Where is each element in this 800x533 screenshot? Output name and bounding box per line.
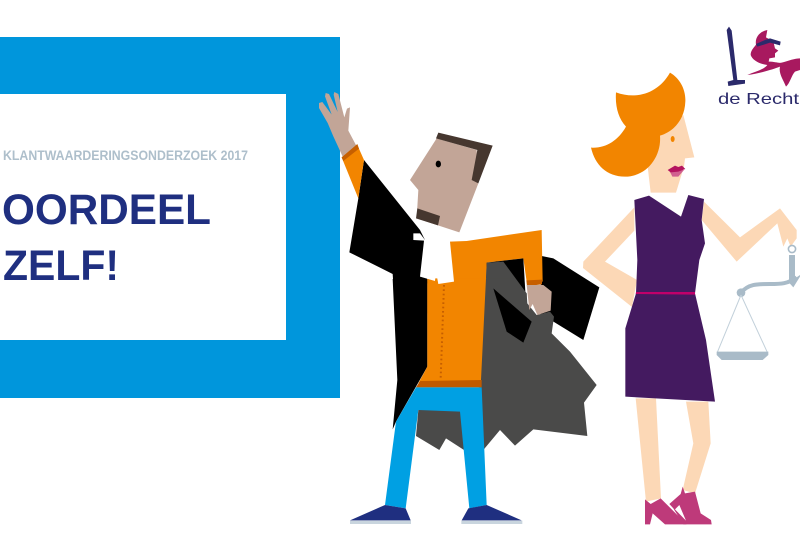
raised right arm: [702, 202, 797, 262]
eye: [436, 161, 441, 167]
subtitle: KLANTWAARDERINGSONDERZOEK 2017: [3, 148, 248, 163]
carried coat: [416, 278, 597, 450]
hair: [591, 73, 685, 177]
shoe gap: [675, 505, 686, 521]
logo text: de Recht: [718, 91, 800, 108]
buttons: [441, 285, 444, 378]
scale pivot: [737, 288, 745, 297]
scale ring: [788, 245, 796, 253]
title: [2, 186, 211, 290]
face and neck: [648, 115, 694, 193]
gown left: [349, 160, 427, 283]
gavel: [727, 27, 745, 86]
raised hand: [319, 92, 357, 158]
coat shadow: [493, 288, 532, 343]
coat fold: [485, 262, 527, 313]
scale stem: [789, 255, 800, 287]
gown lower: [393, 279, 427, 429]
collar: [413, 233, 454, 284]
eye: [671, 136, 675, 142]
head: [410, 138, 478, 232]
scale beam: [741, 277, 797, 293]
shoes: [645, 487, 712, 524]
figure: lawyer: [319, 92, 599, 524]
shoe shadows: [350, 521, 522, 524]
cuff: [342, 144, 359, 161]
right black sleeve: [540, 256, 599, 340]
lawyer lower body: [350, 278, 597, 524]
dress: [625, 195, 715, 402]
torso: [427, 230, 543, 313]
justice figure: [747, 30, 800, 87]
right shoe: [669, 487, 712, 524]
left arm on hip: [583, 207, 637, 307]
woman lower body: [625, 195, 800, 502]
figure: woman with scales: [583, 73, 800, 524]
logo: de Rechtspraak: [718, 27, 800, 108]
woman upper body: [583, 73, 797, 307]
panel: blue frame: [0, 37, 340, 398]
torso lower: [418, 278, 487, 383]
trousers: [385, 387, 487, 508]
hand holding coat: [527, 285, 552, 315]
upper lip: [668, 166, 685, 172]
scale strings: [717, 295, 767, 352]
raised arm sleeve: [342, 145, 364, 198]
logo mark: [727, 27, 800, 87]
lower lip: [669, 170, 684, 177]
blindfold: [756, 38, 781, 47]
legs: [636, 398, 711, 502]
belt: [636, 292, 695, 295]
shoes: [350, 505, 522, 520]
left shoe: [645, 498, 687, 524]
belt: [416, 380, 482, 387]
scale pan: [717, 352, 768, 360]
beard: [416, 208, 440, 225]
sleeve cuff right: [526, 280, 542, 286]
title line 2: ZELF!: [3, 242, 119, 290]
lawyer upper body: [342, 133, 599, 340]
inner lining: [485, 258, 527, 313]
title line 1: OORDEEL: [2, 186, 211, 234]
hair: [436, 133, 493, 183]
